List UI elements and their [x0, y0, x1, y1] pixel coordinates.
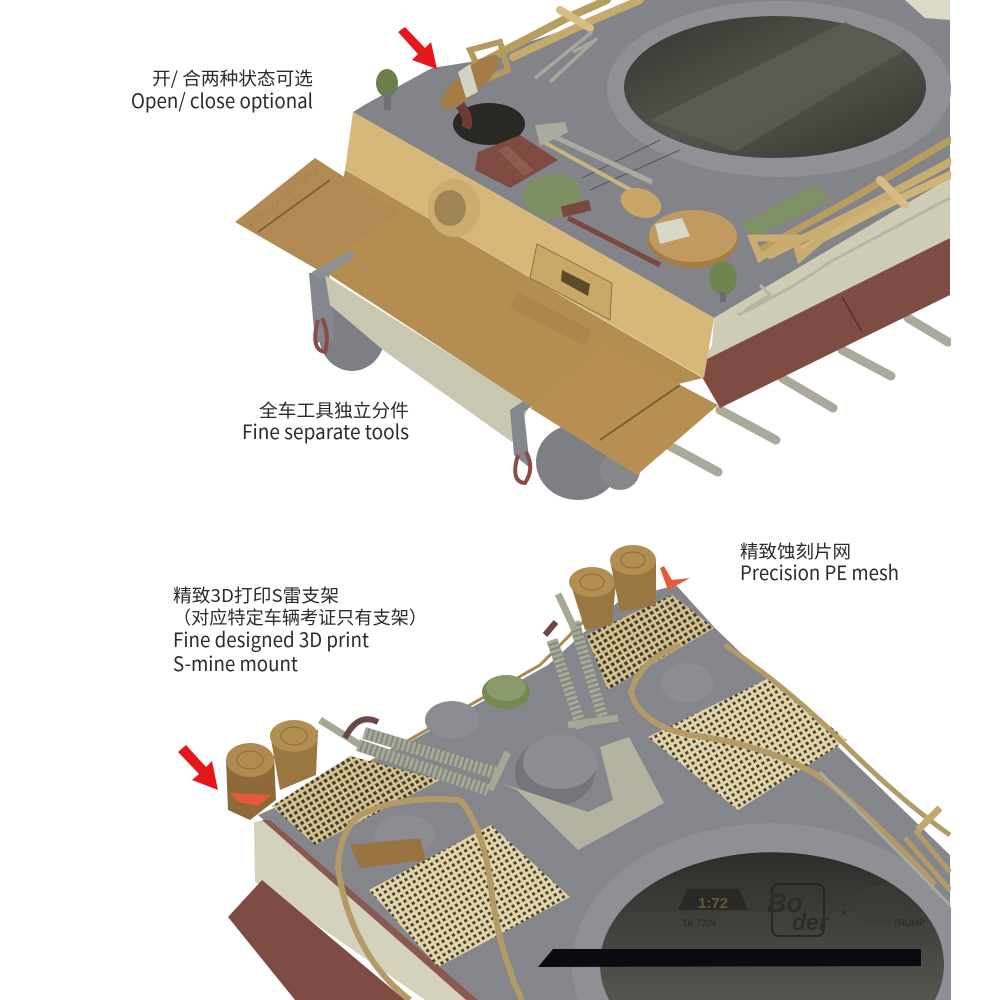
mesh panel front left: [369, 825, 570, 967]
watermark logos: TRUMP: [893, 918, 925, 928]
mesh panel rear left: [272, 756, 440, 845]
mesh panel rear right: [586, 595, 714, 690]
central disc: [515, 735, 597, 806]
rope bundle right: [752, 140, 950, 258]
right fender flap: [530, 345, 718, 475]
top annotation: open close: 开/ 合两种状态可选: [152, 65, 313, 91]
spring pair rear-left: [358, 733, 496, 790]
lower rear plate: [325, 170, 703, 406]
open hatch: [434, 48, 525, 145]
green plates: [740, 185, 832, 237]
wire cutters: [535, 32, 597, 82]
side cable: [738, 198, 950, 315]
bottom annotation: PE mesh: 精致蚀刻片网: [740, 538, 851, 564]
road wheel axles: [668, 318, 948, 472]
sand hull side: [702, 178, 950, 362]
red strip: [262, 820, 478, 1000]
watermark logos: 1:72: [698, 895, 728, 912]
orange etched clamps: [230, 566, 690, 806]
black redaction bar: [538, 949, 921, 967]
rope right: [631, 645, 950, 905]
watermark logos: Bo: [767, 888, 803, 918]
top annotation: separate tools: Fine separate tools: [242, 416, 409, 445]
fan covers: [375, 663, 713, 855]
watermark logos: ×: [841, 908, 847, 919]
bottom annotation: PE mesh: [740, 538, 899, 586]
s-mine cylinders rear left: [226, 720, 318, 820]
s-mine cylinders rear right: [569, 545, 656, 630]
red tool box: [475, 135, 558, 188]
top annotation: separate tools: [242, 397, 409, 445]
mesh panel mid right: [648, 677, 847, 810]
red skirt: [228, 880, 405, 1000]
spring clamps: [320, 594, 618, 790]
engine deck: [353, 0, 950, 318]
bottom annotation: S-mine mount: S-mine mount: [173, 648, 298, 677]
watermark logos: [678, 884, 925, 936]
bottom annotation: S-mine mount: （对应特定车辆考证只有支架）: [173, 604, 427, 630]
red jack tool: [562, 205, 660, 265]
bottom annotation: PE mesh: Precision PE mesh: [740, 557, 899, 586]
small stowage block: [510, 292, 592, 346]
deck seams: [582, 140, 680, 190]
hole light band: [650, 22, 905, 152]
right wheel: [510, 378, 640, 500]
corner plate: [905, 0, 950, 20]
spring pair rear-right: [552, 622, 603, 728]
green round cover: [524, 174, 582, 218]
top annotation: separate tools: 全车工具独立分件: [259, 397, 409, 423]
watermark logos: der: [792, 909, 829, 935]
watermark logos: TK 7209: [682, 918, 716, 928]
red side skirts: [695, 238, 950, 408]
bottom deck: [258, 585, 950, 1000]
turret ring: [607, 1, 951, 177]
green cover: [482, 675, 530, 709]
green vent right: [709, 261, 737, 302]
bottom annotation: S-mine mount: Fine designed 3D print: [173, 624, 369, 653]
bottom callout arrow: [178, 745, 218, 790]
rope bundle top: [470, 0, 640, 80]
tan rear plate: [345, 112, 714, 378]
bottom turret ring: [572, 823, 968, 1000]
turret hole: [624, 16, 926, 158]
rear red pipes: [345, 622, 556, 738]
bottom model: tank front view: [178, 545, 968, 1000]
rope front left: [338, 799, 522, 1000]
bottom annotation: S-mine mount: 精致3D打印S雷支架: [173, 582, 339, 608]
green mushroom vent left: [376, 69, 398, 110]
bottom turret hole: [600, 852, 944, 1000]
tan edge trim: [360, 610, 595, 768]
sand hull rear: [325, 275, 530, 442]
fender bracket left: [312, 250, 356, 280]
mantlet cover: [428, 179, 480, 237]
tan disc with box: [648, 210, 738, 268]
left wheel: [309, 271, 385, 371]
beige L mount: [501, 737, 664, 850]
top callout arrow: [398, 27, 437, 69]
top annotation: open close: Open/ close optional: [131, 85, 313, 114]
left fender flap: [235, 158, 398, 270]
tan tool canister: [350, 838, 426, 868]
sand side wall: [254, 820, 470, 1000]
hammer and shovel: [535, 122, 666, 223]
top model: tank rear view: [235, 0, 951, 500]
engine access panel: [530, 244, 612, 320]
bottom annotation: S-mine mount: [173, 582, 427, 677]
top annotation: open close: [131, 65, 313, 114]
